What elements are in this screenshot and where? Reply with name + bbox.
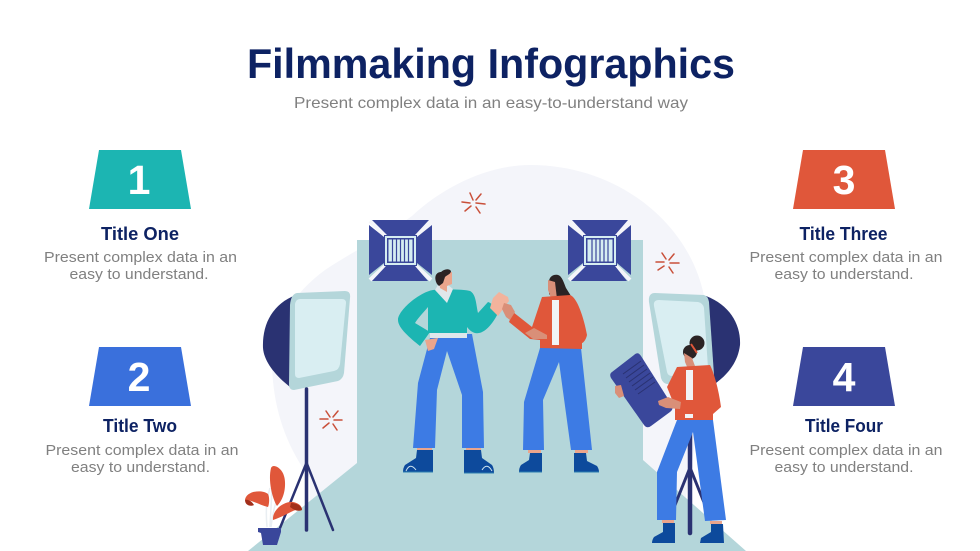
studio floor and wall	[248, 240, 746, 551]
softbox stand: right (behind the assistant)	[649, 293, 740, 533]
panel: item four	[750, 347, 942, 476]
text block: item one: Present complex data in an	[44, 249, 237, 266]
heading: title three: Title Three	[800, 224, 888, 244]
plant	[245, 466, 302, 545]
title: Filmmaking Infographics	[247, 40, 735, 87]
text block: item four: easy to understand.	[774, 459, 914, 476]
badge 2	[89, 347, 191, 406]
text block: item one: easy to understand.	[70, 266, 208, 283]
heading: title one: Title One	[101, 224, 179, 244]
person: woman in red jacket	[502, 275, 599, 472]
top light: left	[369, 220, 432, 281]
text block: item three: easy to understand.	[774, 266, 914, 283]
spark: top	[462, 193, 485, 213]
badge 1	[89, 150, 191, 209]
badge 3: 3	[833, 157, 855, 203]
text block: item three: Present complex data in an	[750, 249, 942, 266]
text block: item one	[44, 249, 237, 283]
badge 2: 2	[128, 354, 150, 400]
text block: item two: easy to understand.	[71, 459, 210, 476]
badge 4	[793, 347, 895, 406]
spark: right	[656, 253, 679, 273]
badge 3	[793, 150, 895, 209]
person: man in teal sweater	[398, 269, 509, 473]
spark: left	[320, 411, 342, 430]
badge 1: 1	[128, 157, 150, 203]
text block: item two	[46, 442, 238, 476]
person: woman holding clipboard	[610, 336, 726, 543]
text block: item four	[750, 442, 942, 476]
heading: title two: Title Two	[103, 416, 177, 436]
softbox stand: left	[263, 291, 350, 530]
badge 4: 4	[833, 354, 856, 400]
text block: item three	[750, 249, 942, 283]
heading: title four: Title Four	[805, 416, 883, 436]
studio backdrop blob	[272, 165, 707, 530]
subtitle: Present complex data in an easy-to-understand way	[294, 95, 688, 112]
panel: item one	[44, 150, 237, 283]
top light: right	[568, 220, 631, 281]
text block: item four: Present complex data in an	[750, 442, 942, 459]
text block: item two: Present complex data in an	[46, 442, 238, 459]
illustration: film studio	[245, 165, 746, 551]
clipboard	[610, 353, 673, 427]
panel: item two	[46, 347, 238, 476]
panel: item three	[750, 150, 942, 283]
